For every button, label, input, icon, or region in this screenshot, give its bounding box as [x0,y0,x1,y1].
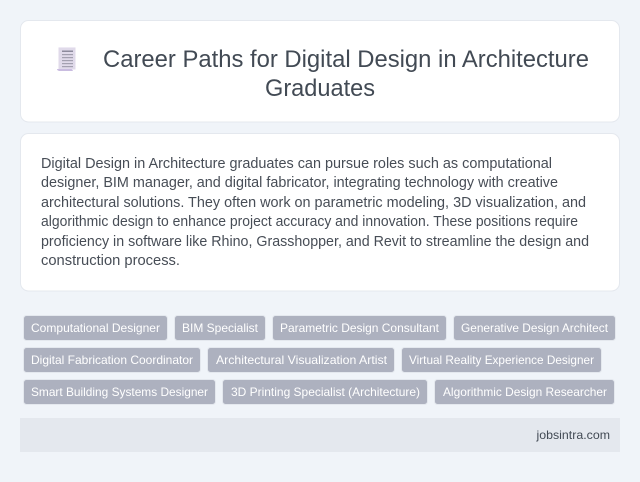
tag: Parametric Design Consultant [272,316,446,340]
tag: Architectural Visualization Artist [208,348,394,372]
description text [41,156,589,269]
tag: 3D Printing Specialist (Architecture) [222,380,428,404]
tag: Generative Design Architect: Generative Design Architect [461,321,609,335]
title: Career Paths for Digital Design in Architecture [103,46,589,73]
tag: Virtual Reality Experience Designer [402,348,602,372]
tag: Computational Designer [24,316,168,340]
tag: BIM Specialist: BIM Specialist [182,321,259,335]
footer bar [20,418,620,452]
description text: Digital Design in Architecture graduates can pursue roles such as computational [41,156,552,172]
description text: designer, BIM manager, and digital fabricator, integrating technology with creative [41,175,558,191]
icon: document scroll [57,47,76,71]
description text: proficiency in software like Rhino, Grasshopper, and Revit to streamline the design and [41,234,589,250]
description text: construction process. [41,253,180,269]
description text: algorithmic design to enhance project accuracy and innovation. These positions require [41,214,578,230]
footer source text: jobsintra.com [535,428,610,442]
tag: Digital Fabrication Coordinator: Digital Fabrication Coordinator [31,353,193,367]
tag: Generative Design Architect [454,316,616,340]
panel: header card [20,20,620,122]
tag: Computational Designer: Computational Designer [31,321,160,335]
tag: Algorithmic Design Researcher: Algorithmic Design Researcher [443,385,607,399]
tag: BIM Specialist [174,316,266,340]
tag: Digital Fabrication Coordinator [24,348,200,372]
panel: description card [20,134,620,291]
tag list [24,316,616,404]
tag: Virtual Reality Experience Designer: Virtual Reality Experience Designer [409,353,594,367]
title: Graduates [265,75,375,102]
tag: Smart Building Systems Designer: Smart Building Systems Designer [31,385,208,399]
title [103,46,589,102]
tag: Architectural Visualization Artist: Architectural Visualization Artist [216,353,388,367]
tag: Smart Building Systems Designer [24,380,216,404]
tag: 3D Printing Specialist (Architecture): 3D Printing Specialist (Architecture) [231,385,420,399]
tag: Algorithmic Design Researcher [434,380,614,404]
tag: Parametric Design Consultant: Parametric Design Consultant [280,321,440,335]
description text: architectural solutions. They often work on parametric modeling, 3D visualization, and [41,195,586,211]
